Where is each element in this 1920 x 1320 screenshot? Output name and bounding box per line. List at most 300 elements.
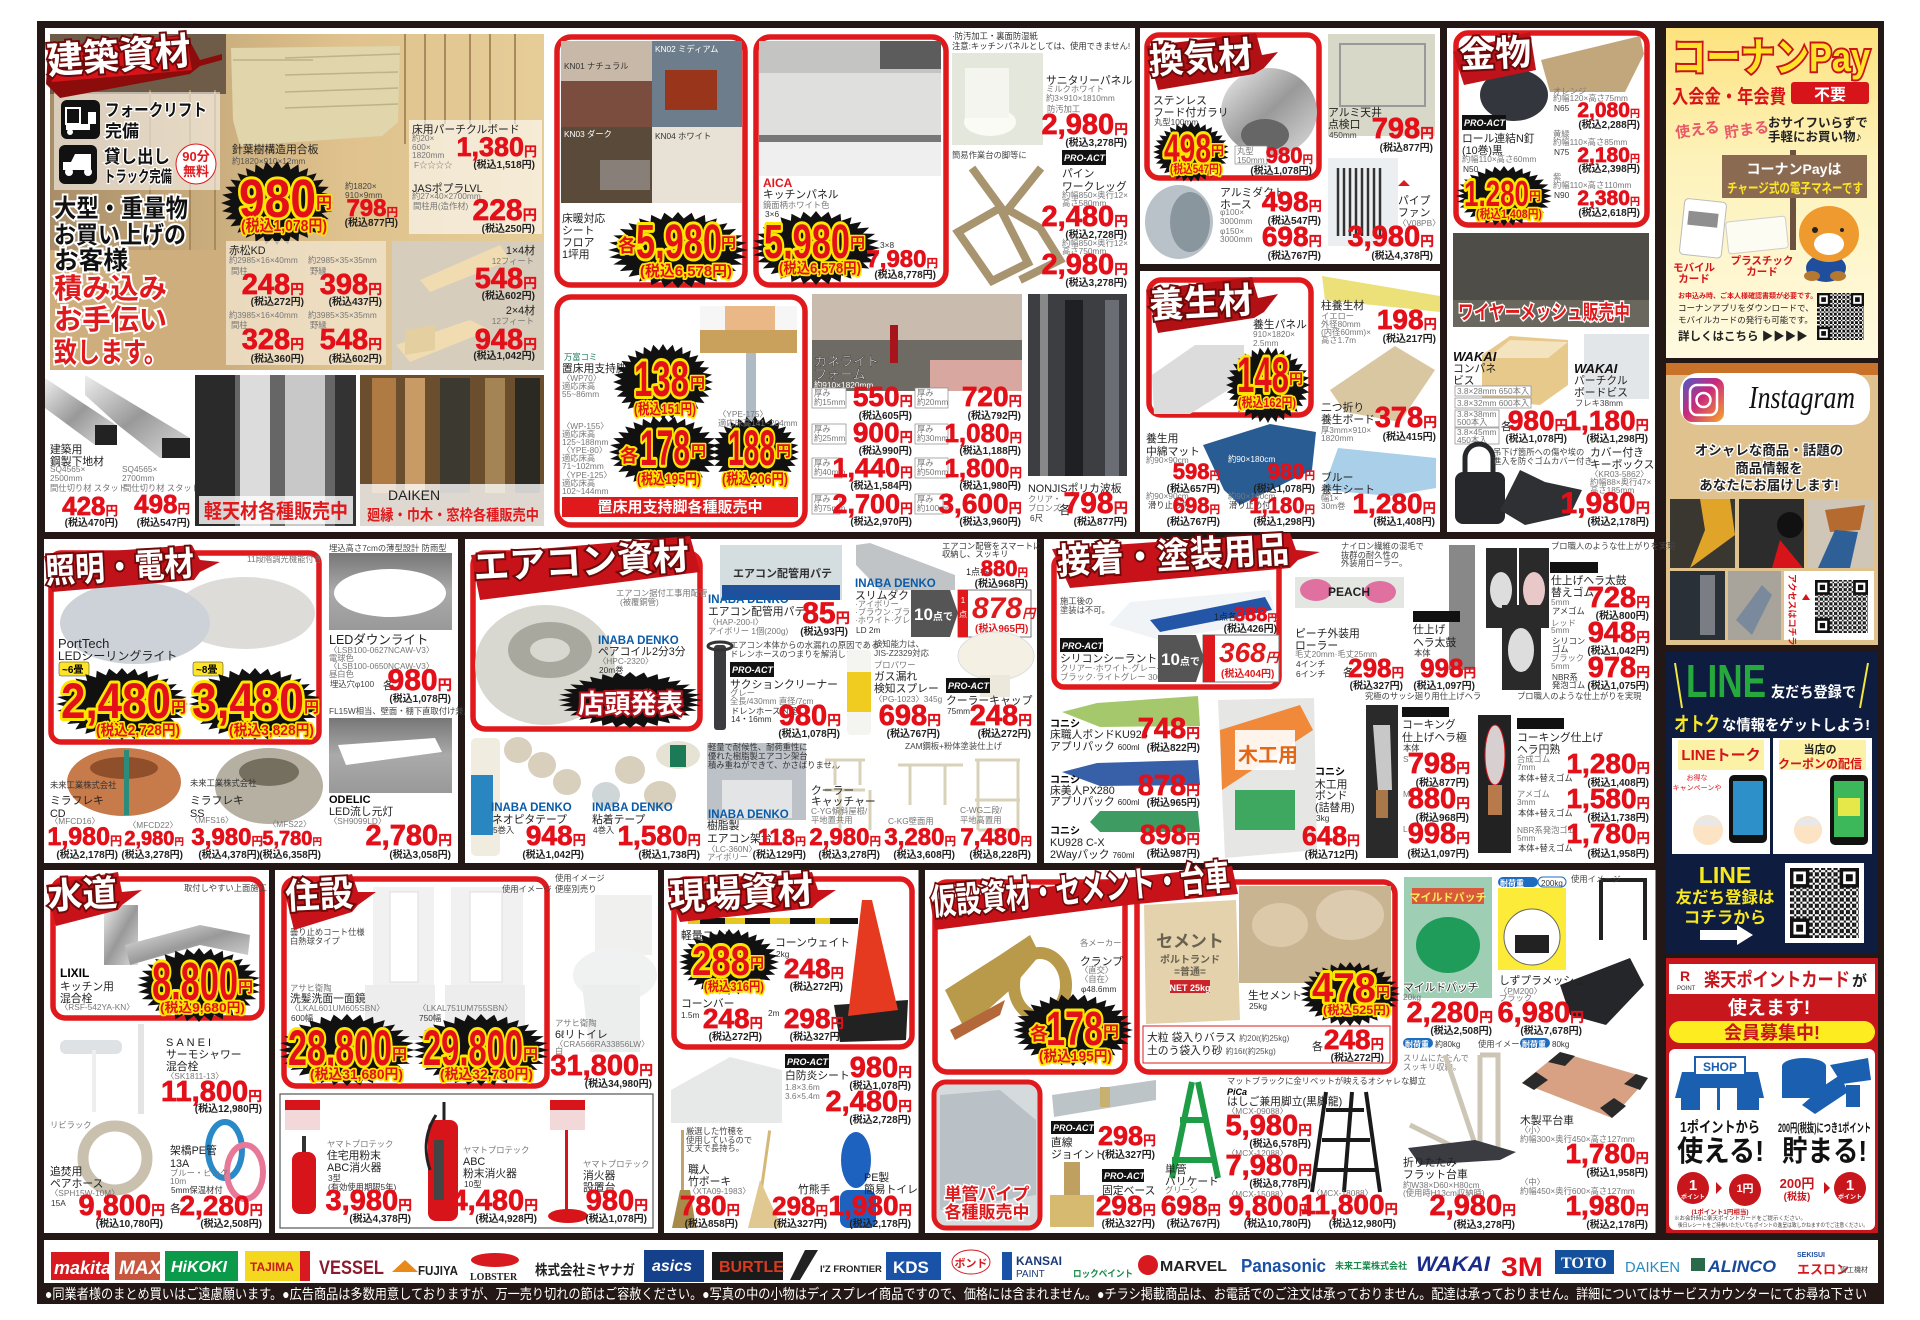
product: 木製平台車: (税込1,958円) — [1586, 1166, 1648, 1179]
product: パインワークレッグ: 2,980円 — [1042, 249, 1128, 281]
heading 仮設資材・セメント・台車 — [928, 848, 1238, 930]
box: LEDシーリングライト: 2,480 — [61, 673, 171, 729]
product: 木製平台車: 〈中〉 — [1520, 1177, 1545, 1187]
panel: 赤松KD: (税込602円) — [329, 352, 382, 365]
product: ネオピタテープ: ネオピタテープ — [492, 813, 567, 826]
LINE 友だち登録はコチラから: コチラから — [1684, 908, 1766, 927]
product: 消火器設置台 — [548, 1100, 649, 1225]
product: パーチクルボードビス: フレキ38mm — [1575, 398, 1623, 408]
text block: オシャレな商品・話題の — [1695, 442, 1843, 458]
price: 798 合板9mm: (税込877円) — [345, 216, 398, 229]
box: セメント: 大粒 袋入りバラス 約20ℓ(約25kg) — [1147, 1030, 1290, 1044]
product: パーチクルボードビス: 1,180円 — [1565, 405, 1649, 436]
product: コーキング仕上げヘラ円熟: 1,780円 — [1566, 818, 1650, 849]
panel: 照明・電材 — [44, 536, 472, 863]
Pay notes: 詳しくはこちら ▶▶▶▶ — [1678, 329, 1808, 343]
product: 木工用ボンド: ボンド — [1315, 789, 1347, 802]
card: LINEトーク — [1672, 738, 1770, 854]
product: コーキング仕上げヘラ極: 本体 — [1403, 743, 1420, 753]
product: クーラーキャッチャー: 7,480円 — [960, 824, 1032, 851]
sign: チャージ式の電子マネー: コーナンPayは — [1747, 161, 1841, 177]
product: 二つ折り養生ボード: 378円 — [1375, 402, 1437, 434]
product: 養生用中綿マット: 中綿マット — [1146, 444, 1200, 458]
貯まる column: 200円 — [1780, 1176, 1814, 1191]
product: 固定ベース: 298円 — [1096, 1190, 1156, 1221]
product: エアコン配管用パテ — [708, 545, 850, 638]
photo: ワイヤーメッシュ — [1453, 233, 1649, 327]
brand logo strip — [44, 1240, 1878, 1283]
product: サニタリーパネル: 2,980円 — [1042, 109, 1128, 141]
box: ロール連結N釘: (税込2,288円) — [1578, 118, 1640, 131]
product: 柱養生材: 高さ1.7m — [1321, 335, 1356, 345]
truck label — [104, 146, 172, 186]
panel: 水道 — [44, 864, 272, 1233]
box: 床暖対応シートフロア: 1坪用 — [562, 248, 590, 261]
product: 養生用中綿マット: 1,180円 — [1249, 493, 1315, 518]
box: ステンレスフード付ガラリ — [1146, 35, 1319, 187]
product: コーキング仕上げヘラ極: 798円 — [1408, 748, 1470, 780]
product: LED流し元灯: ODELIC — [329, 794, 371, 806]
product: 床用パーチクルボード: 600× — [412, 142, 431, 152]
product: はしご兼用脚立 — [1226, 1076, 1426, 1230]
logo I'Z FRONTIER: I'Z FRONTIER — [820, 1264, 882, 1275]
product: LEDダウンライト: 各 — [383, 678, 394, 692]
box: 洗髪洗面一面鏡: 29,800 — [423, 1020, 523, 1076]
product: 木製平台車: 〈小〉 — [1520, 1125, 1545, 1135]
product: 住宅用粉末ABC消火器: (税込4,378円) — [349, 1212, 411, 1225]
product: 養生用中綿マット: (税込1,298円) — [1253, 515, 1315, 528]
logo TAJIMA: TAJIMA — [250, 1260, 294, 1274]
panel: 住設 — [267, 864, 658, 1233]
icon: paint and drill — [1782, 1058, 1871, 1114]
product: KU928 C-X: 898円 — [1140, 819, 1200, 850]
access QR: アクセスはコチラ — [1787, 574, 1797, 646]
price grid: カネライトフォーム: (税込1,584円) — [850, 479, 912, 492]
price grid: カネライトフォーム: 厚み — [814, 424, 831, 434]
product: 柱養生材: (税込217円) — [1383, 332, 1436, 345]
text block: 積み込みお手伝い: お手伝い — [54, 304, 167, 335]
product: ミラフレキCD — [47, 748, 184, 861]
logo asics: asics — [652, 1258, 692, 1275]
product: パインワークレッグ: PRO-ACT — [1064, 153, 1106, 163]
product: 折りたたみフラット台車: 使用イメージ — [1478, 1039, 1528, 1049]
product: コンパネビス — [1453, 336, 1568, 445]
product: ミラフレキSS: 〈MFS22〉 — [268, 819, 311, 829]
box: ステンレスフード付ガラリ: 丸型100mm — [1154, 117, 1198, 127]
product: 鋼製下地材: SQ4565× — [50, 464, 85, 474]
product: クーラーキャッチャー: 平地高置用 — [960, 815, 1002, 825]
product: 鋼製下地材: 498円 — [134, 489, 190, 519]
box: 置床用支持脚: 適応床高 — [562, 429, 595, 439]
product: LEDダウンライト: 埋込高さ7cmの薄型設計 防雨型 — [329, 543, 447, 553]
box: 置床用支持脚: 円 — [690, 375, 705, 392]
box: ステンレスフード付ガラリ: 150mm — [1237, 155, 1265, 165]
product: コンパネビス: 3.8×28mm 650本入 — [1457, 386, 1530, 396]
product: アルミダクトホース: φ150× — [1220, 226, 1244, 236]
product: ピーチ外装用ローラー: PEACH — [1328, 585, 1370, 599]
product: コンパネビス: 各 — [1501, 419, 1512, 433]
text block: 積み込みお手伝い: 積み込み — [54, 273, 167, 304]
photo: 廻縁・巾木・窓枠各種販売中 — [360, 375, 544, 526]
product: サーモシャワー混合栓 — [60, 1024, 262, 1115]
product: 架橋PE管: 架橋PE管 — [170, 1143, 217, 1157]
product: コンパネビス: ビス — [1453, 374, 1475, 387]
box: セメント: セメント — [1156, 932, 1224, 951]
box: コーン: 248円 — [703, 1003, 763, 1034]
logo MARVEL — [1138, 1255, 1227, 1275]
product: 仕上げヘラ太鼓替えゴム: (税込800円) — [1596, 609, 1649, 622]
product: 樹脂製エアコン架台: 軽量で耐候性、耐荷重性に — [708, 742, 808, 752]
product: PE製簡易トイレ: PE製 — [864, 1170, 889, 1184]
product: 消火器設置台: 設置台 — [583, 1180, 616, 1194]
product: 白防炎シート: PRO-ACT — [787, 1057, 829, 1067]
box: ステンレスフード付ガラリ: 丸型 — [1237, 146, 1254, 156]
box: キッチン用混合栓: 取付しやすい上面施工 — [184, 883, 267, 893]
product: ミラフレキSS: (税込4,378円) — [198, 848, 260, 861]
access QR — [1784, 571, 1874, 646]
product: クーラーキャッチャー: (税込3,608円) — [893, 848, 955, 861]
card: LINEトーク: お得な — [1686, 773, 1708, 782]
product: アルミ天井点検口: 450mm — [1329, 130, 1357, 140]
product: カバー付きキーボックス: (税込2,178円) — [1587, 515, 1649, 528]
heading 接着・塗装用品: 接着・塗装用品 — [1056, 521, 1290, 585]
price grid: カネライトフォーム: 厚み — [917, 458, 934, 468]
会員募集中 — [1669, 1021, 1875, 1043]
product: LED流し元灯: 〈SH9099LD〉 — [329, 816, 386, 826]
product: コーキング仕上げヘラ極: (税込968円) — [1416, 811, 1469, 824]
使える column: 使える! — [1677, 1135, 1764, 1168]
box: 置床用支持脚: 適応床高 — [562, 381, 595, 391]
product: 仕上げヘラ太鼓: (税込1,097円) — [1413, 679, 1475, 692]
product: コーキング仕上げヘラ円熟: アメゴム — [1517, 789, 1550, 799]
product: 樹脂製エアコン架台 — [707, 742, 840, 862]
product: コーキング仕上げヘラ円熟: ヘラ円熟 — [1517, 742, 1560, 756]
product: スリムダクト: 878円 — [972, 592, 1037, 625]
price grid: カネライトフォーム: 約15mm — [814, 397, 845, 407]
貯まる column: 1 — [1846, 1177, 1854, 1194]
product: 6ℓリトイレ: 便座別売り — [555, 884, 596, 894]
product: 養生用中綿マット: 滑り止め付 — [1148, 500, 1190, 510]
box: キッチンパネル: 3×8 — [880, 240, 894, 250]
product: コンパネビス: (税込1,078円) — [1505, 432, 1567, 445]
product: アルミダクトホース: ホース — [1220, 198, 1252, 211]
product: コンパネビス: 3.8×38mm — [1457, 409, 1497, 419]
product: 床美人PX280: コニシ — [1050, 775, 1080, 786]
product: スリムダクト: ·アイボリー — [855, 599, 899, 609]
product: カバー付きキーボックス: 高さ185mm — [1590, 485, 1634, 495]
product: ガス漏れ検知スプレー: プロパワー — [874, 660, 916, 670]
product: 架橋PE管: 5mm保温材付 — [171, 1185, 223, 1195]
product: PE製簡易トイレ — [828, 1132, 918, 1230]
product: 木製平台車: 1,780円 — [1565, 1138, 1649, 1169]
product: クーラーキャッチャー: クーラー — [811, 784, 854, 797]
product: ガス漏れ検知スプレー: 検知スプレー — [874, 681, 939, 695]
product: NONJISポリカ波板: NONJISポリカ波板 — [1028, 481, 1122, 495]
box: セメント — [1137, 882, 1409, 1072]
product: 竹熊手: 298円 — [772, 1191, 828, 1221]
box: シリコンシーラント: ブラック·ライトグレー 300ml — [1060, 672, 1171, 682]
product: 木工用ボンド: (詰替用) — [1315, 800, 1355, 814]
product: LEDダウンライト: 980円 — [388, 664, 452, 697]
product: 仕上げヘラ太鼓替えゴム: NBR系 — [1552, 672, 1578, 682]
panel: 赤松KD: 328円 — [242, 324, 304, 356]
product: 追焚用ペアホース: 追焚用 — [50, 1164, 82, 1178]
box: セメント: ポルトランド — [1160, 954, 1220, 966]
box: 置床用支持脚: 〈WP70〉 — [562, 373, 601, 383]
heading 住設: 住設 — [284, 864, 354, 920]
product: 床用パーチクルボード: F☆☆☆☆ — [414, 160, 452, 170]
product: ミラフレキSS: 5,780円 — [262, 828, 322, 850]
box: キッチン用混合栓: (税込9,680円) — [160, 1000, 245, 1015]
logo KANSAI PAINT: PAINT — [1016, 1269, 1045, 1280]
box: 置床用支持脚: 71~102mm — [562, 461, 604, 471]
logo 未来工業: 未来工業株式会社 — [1335, 1260, 1407, 1271]
panel: 1×4材 2×4材: (税込1,042円) — [473, 349, 535, 362]
product: ミラフレキSS: (税込6,358円) — [259, 848, 321, 861]
product: 仕上げヘラ太鼓替えゴム: (税込1,042円) — [1587, 644, 1649, 657]
box: 置床用支持脚 — [557, 297, 807, 525]
panel: 現場資材 — [664, 860, 918, 1233]
product: 粘着テープ: 1,580円 — [617, 820, 701, 851]
product: エアコン配管用パテ: エアコン配管用パテ — [733, 566, 832, 580]
icon: truck — [59, 145, 97, 184]
box: コーン: 298円 — [784, 1003, 844, 1034]
box: 単管パイプ — [934, 1082, 1040, 1228]
product: マイルドパッチ: 2,280円 — [1407, 997, 1493, 1029]
product: ミラフレキCD: 2,980円 — [124, 828, 184, 850]
product: ABC粉末消火器: 4,480円 — [452, 1185, 538, 1217]
使える貯まる — [1674, 118, 1770, 142]
logo MAX — [115, 1252, 163, 1280]
product: LEDダウンライト: 〈LSB100-0650NCAW-V3〉 — [329, 661, 434, 671]
product: ミラフレキSS: SS — [190, 808, 204, 820]
photo: 廻縁・巾木・窓枠各種販売中: DAIKEN — [388, 487, 440, 503]
product: クーラーキャッチャー: C-YG傾斜屋根/ — [811, 806, 868, 816]
Pay notes — [1678, 291, 1817, 343]
product: 直線ジョイント: 直線 — [1051, 1136, 1073, 1149]
box: 置床用支持脚: 置床用支持脚各種販売中 — [597, 498, 763, 516]
product: 仕上げヘラ太鼓替えゴム: 替えゴム — [1551, 585, 1594, 599]
product: 6ℓリトイレ: 〈CRA566RA33856LW〉 — [555, 1039, 649, 1049]
box: ステンレスフード付ガラリ: 498 — [1164, 127, 1211, 171]
box: コーン: 288 — [692, 937, 750, 984]
product: ピーチ外装用ローラー: ローラー — [1295, 640, 1338, 652]
box: 置床用支持脚: 円 — [691, 443, 706, 460]
box: 洗髪洗面一面鏡: 円 — [523, 1046, 538, 1063]
product: LED流し元灯: FL15W相当、壁面・棚下直取付け兼用 — [329, 706, 472, 716]
box: セメント: (税込525円) — [1323, 1002, 1390, 1017]
box: コーン: 2kg — [776, 949, 790, 959]
product: コーキング仕上げヘラ極: コーキング — [1402, 717, 1456, 731]
product: コーキング仕上げヘラ極: 究極のサッシ廻り用仕上げヘラ — [1365, 691, 1481, 701]
heading 照明・電材: 照明・電材 — [44, 536, 195, 593]
box: ロール連結N釘: N50 — [1463, 164, 1479, 174]
panel: 赤松KD: 野縁 — [310, 266, 327, 276]
box: クランプ: クランプ — [1080, 955, 1123, 968]
product: はしご兼用脚立: 9,800円 — [1228, 1190, 1312, 1221]
product: JASポプラLVL: 228円 — [473, 194, 537, 227]
product: サーモシャワー混合栓: SANEI — [166, 1037, 214, 1049]
product: しずプラメッシュ: 〈PM200〉 — [1499, 986, 1542, 996]
product: 架橋PE管: ブルー・ピンク — [170, 1168, 228, 1178]
price: 798 合板9mm: 約1820× — [345, 181, 377, 191]
box: 養生パネル: 910×1820× — [1253, 329, 1295, 339]
photo: カネライトフォーム: フォーム — [814, 367, 866, 382]
logo ALINCO: ALINCO — [1707, 1257, 1776, 1276]
product: 床職人ボンド: コニシ — [1050, 719, 1080, 730]
icon: instagram — [1683, 378, 1724, 422]
product: 木工用ボンド: 木工用 — [1238, 744, 1298, 767]
product: 追焚用ペアホース: 15A — [51, 1198, 66, 1208]
product: パインワークレッグ: 2,480円 — [1042, 201, 1128, 233]
box: クランプ: 〈自在〉 — [1080, 974, 1113, 984]
product: KU928 C-X: (税込987円) — [1147, 847, 1200, 860]
product: スリムダクト: ·ブラウン·ブラック — [855, 607, 927, 617]
product: はしご兼用脚立: (税込12,980円) — [1329, 1217, 1396, 1230]
logo TOTO: TOTO — [1561, 1255, 1607, 1272]
product: サニタリーパネル: 注意:キッチンパネルとしては、使用できません! — [952, 41, 1130, 51]
icon: mobile and plastic card: カード — [1746, 266, 1778, 278]
おサイフいらずで: 手軽にお買い物♪ — [1768, 129, 1862, 144]
box: キッチンパネル: 7,980円 — [866, 246, 938, 273]
product: コーキング仕上げヘラ極: S — [1403, 754, 1409, 764]
product: 仕上げヘラ太鼓替えゴム — [1486, 541, 1676, 692]
box: キッチンパネル: 5,980 — [764, 216, 850, 269]
heading 仮設資材・セメント・台車: 仮設資材・セメント・台車 — [928, 848, 1232, 926]
box: クランプ: 各メーカー — [1080, 938, 1122, 948]
box: コーン: 1.5m — [681, 1010, 700, 1020]
box: シリコンシーラント: 388円 — [1234, 604, 1277, 626]
box: LEDシーリングライト: (税込2,728円) — [96, 722, 180, 739]
box: クランプ: (税込195円) — [1039, 1048, 1112, 1065]
product: 床職人ボンド: アプリパック 600ml — [1050, 740, 1140, 753]
product: ABC粉末消火器: ABC — [463, 1156, 485, 1168]
product: 粘着テープ — [592, 741, 701, 861]
product: ABC粉末消火器: 10型 — [464, 1179, 482, 1189]
box: ステンレスフード付ガラリ: 円 — [1211, 143, 1224, 158]
card: LINEトーク: LINEトーク — [1681, 747, 1761, 764]
product: 養生用中綿マット: 698円 — [1173, 493, 1220, 518]
product: 6ℓリトイレ — [550, 873, 657, 1090]
price grid: カネライトフォーム: 厚み — [917, 388, 934, 398]
panel: 赤松KD: 約2985×35×35mm — [308, 255, 377, 265]
product: JASポプラLVL: JASポプラLVL — [412, 182, 483, 195]
logo MARVEL: MARVEL — [1160, 1258, 1227, 1275]
panel: 赤松KD: 約3985×16×40mm — [229, 310, 298, 320]
product: はしご兼用脚立: (税込10,780円) — [1244, 1217, 1311, 1230]
product: 鋼製下地材: 鋼製下地材 — [50, 454, 104, 468]
product: 床美人PX280: 878円 — [1138, 770, 1200, 802]
product: サクションクリーナー: ドレンホース内径 — [731, 706, 798, 716]
product: サクションクリーナー: エアコン本体からの水漏れの原因である — [730, 640, 879, 650]
product: 架橋PE管: 13A — [170, 1158, 190, 1170]
product: クーラーキャップ: PRO-ACT — [948, 681, 990, 691]
product: 木製平台車: 約幅300×奥行450×高さ127mm — [1520, 1134, 1635, 1144]
box: キッチンパネル — [741, 37, 946, 292]
product: ガス漏れ検知スプレー: 検知能力は、 — [874, 639, 924, 649]
product: 追焚用ペアホース: 〈SPH15W-10M〉 — [50, 1188, 119, 1198]
box: コーン: 2m — [768, 1008, 780, 1018]
product: 仕上げヘラ太鼓替えゴム: 5mm — [1551, 597, 1570, 607]
box: シリコンシーラント: 368円 — [1219, 637, 1281, 668]
product: サクションクリーナー: グレー — [730, 688, 755, 698]
product: 養生用中綿マット: 約90×180cm — [1228, 454, 1275, 464]
price grid: カネライトフォーム: (税込792円) — [968, 409, 1021, 422]
product: ピーチ外装用ローラー: 298円 — [1348, 653, 1404, 683]
box: シリコンシーラント: PRO-ACT — [1062, 641, 1104, 651]
product: はしご兼用脚立: 11,800円 — [1300, 1189, 1398, 1220]
product: コーキング仕上げヘラ円熟: (税込1,958円) — [1587, 847, 1649, 860]
panel: 1×4材 2×4材: 12フィート — [492, 256, 534, 266]
貯まる column — [1778, 1120, 1871, 1204]
product: 床用パーチクルボード: 1,380円 — [456, 132, 537, 162]
product: コーキング仕上げヘラ極: M — [1403, 789, 1410, 799]
box: ペアコイル: INABA DENKO — [598, 635, 679, 647]
box: LEDシーリングライト: 3,480 — [192, 673, 304, 729]
card: クーポンの配信: 当店の — [1804, 742, 1836, 756]
panel: 赤松KD: 野縁 — [310, 320, 327, 330]
panel: 赤松KD: 赤松KD — [229, 243, 266, 257]
panel: 赤松KD: 398円 — [320, 269, 382, 301]
product: コンパネビス: 500本入 — [1457, 417, 1488, 427]
product: しずプラメッシュ: ブラック — [1499, 993, 1532, 1003]
product: サクションクリーナー — [708, 640, 879, 740]
text block: 積み込みお手伝い: 大型・重量物 — [54, 195, 188, 223]
product: パーチクルボードビス — [1565, 334, 1649, 445]
box: 置床用支持脚: 置床用支持脚 — [562, 361, 627, 375]
product: はしご兼用脚立: 〈MCX-18088〉 — [1312, 1188, 1373, 1198]
product: 白防炎シート: (税込1,078円) — [849, 1079, 911, 1092]
product: はしご兼用脚立: 5,980円 — [1226, 1110, 1312, 1142]
product: 白防炎シート: 3.6×5.4m — [785, 1091, 820, 1101]
box: 洗髪洗面一面鏡: 〈LKAL751UM755SBN〉 — [418, 1003, 513, 1013]
product: 折りたたみフラット台車: 約80kg — [1435, 1039, 1460, 1049]
box: ロール連結N釘: 黄緑 — [1553, 129, 1570, 139]
product: カバー付きキーボックス: 約幅88×奥行47× — [1590, 477, 1651, 487]
product: サニタリーパネル: 防汚加工 — [1047, 104, 1080, 114]
product: ミラフレキSS: 3,980円 — [191, 824, 263, 851]
price grid: カネライトフォーム: 厚み — [814, 494, 831, 504]
product: 折りたたみフラット台車: (使用時H13cm収納時) — [1403, 1188, 1485, 1198]
price grid: カネライトフォーム: 約75mm — [814, 503, 845, 513]
product: 単管バリケード: バリケード — [1165, 1175, 1219, 1188]
使える貯まる: 貯まる — [1723, 119, 1770, 142]
product: 養生用中綿マット: 養生用 — [1146, 431, 1178, 445]
product: LEDダウンライト: 電球色 — [329, 653, 354, 663]
product: ブルー養生シート — [1321, 448, 1436, 528]
box: 置床用支持脚: 円 — [776, 443, 791, 460]
使えます: 使えます! — [1728, 997, 1810, 1019]
panel: 1×4材 2×4材: 2×4材 — [506, 303, 535, 317]
price grid: カネライトフォーム: 約50mm — [917, 467, 948, 477]
product: JASポプラLVL — [412, 182, 537, 235]
product: 柱養生材: 外径80mm — [1321, 319, 1361, 329]
product: 折りたたみフラット台車: 約W38×D60×H80cm — [1403, 1180, 1480, 1190]
product: 鋼製下地材: (税込547円) — [137, 516, 190, 529]
product: 仕上げヘラ太鼓替えゴム: 948円 — [1588, 617, 1650, 649]
box: ペアコイル: (被覆銅管) — [620, 597, 659, 607]
box: キッチン用混合栓: 円 — [238, 979, 253, 996]
box: LEDシーリングライト: 円 — [171, 699, 186, 716]
logo BURTLE — [712, 1252, 784, 1280]
product: 仕上げヘラ太鼓: 仕上げ — [1413, 623, 1446, 636]
product: ピーチ外装用ローラー: 各 — [1343, 665, 1354, 679]
icon: mobile and plastic card: カード — [1678, 273, 1710, 285]
product: アルミダクトホース: φ100× — [1220, 207, 1244, 217]
box: ステンレスフード付ガラリ: フード付ガラリ — [1153, 106, 1229, 119]
logo LOBSTER: LOBSTER — [470, 1272, 518, 1283]
panel: 赤松KD: 間柱 — [231, 320, 248, 330]
